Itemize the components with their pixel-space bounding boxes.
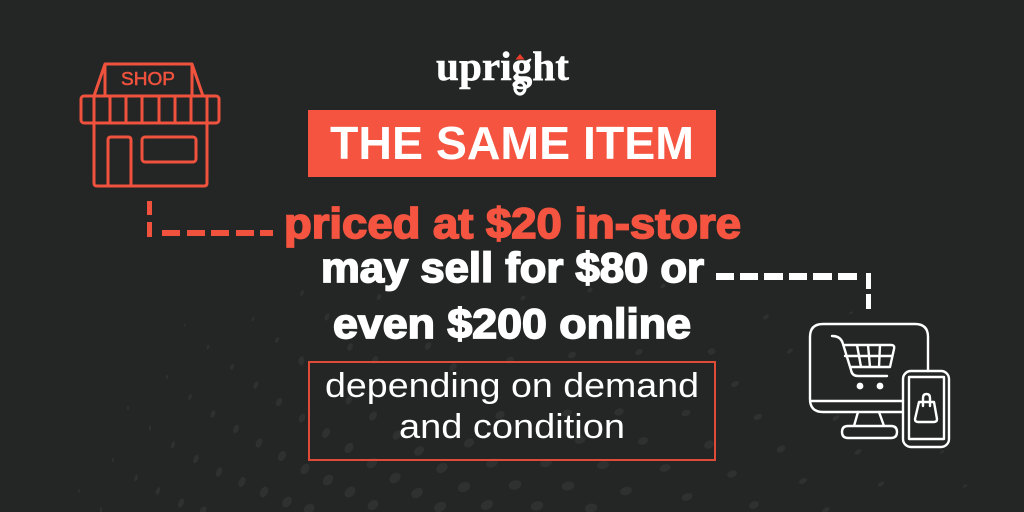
monitor (810, 324, 928, 412)
logo: upright: upright (436, 43, 569, 89)
shopping bag (915, 394, 937, 422)
icon: shop: SHOP (121, 69, 175, 89)
callout: depending on demand and condition (309, 362, 715, 460)
text: in-store price: priced at $20 in-store (284, 200, 741, 248)
callout: depending on demand and condition: depending on demand (325, 367, 699, 405)
text: online price line one: may sell for $80 or (321, 244, 704, 291)
heading banner: the same item: THE SAME ITEM (330, 117, 694, 169)
callout: depending on demand and condition: and condition (399, 408, 625, 446)
monitor stand (842, 412, 897, 438)
arrow: dashed connector from shop (147, 201, 273, 237)
shopping cart (832, 336, 894, 376)
icon: online shopping devices (810, 324, 949, 447)
heading banner: the same item (308, 110, 716, 177)
text: online price line two: even $200 online (333, 300, 691, 347)
icon: shop (81, 64, 219, 186)
arrow: dashed connector to online devices (716, 273, 871, 309)
phone (903, 371, 949, 447)
